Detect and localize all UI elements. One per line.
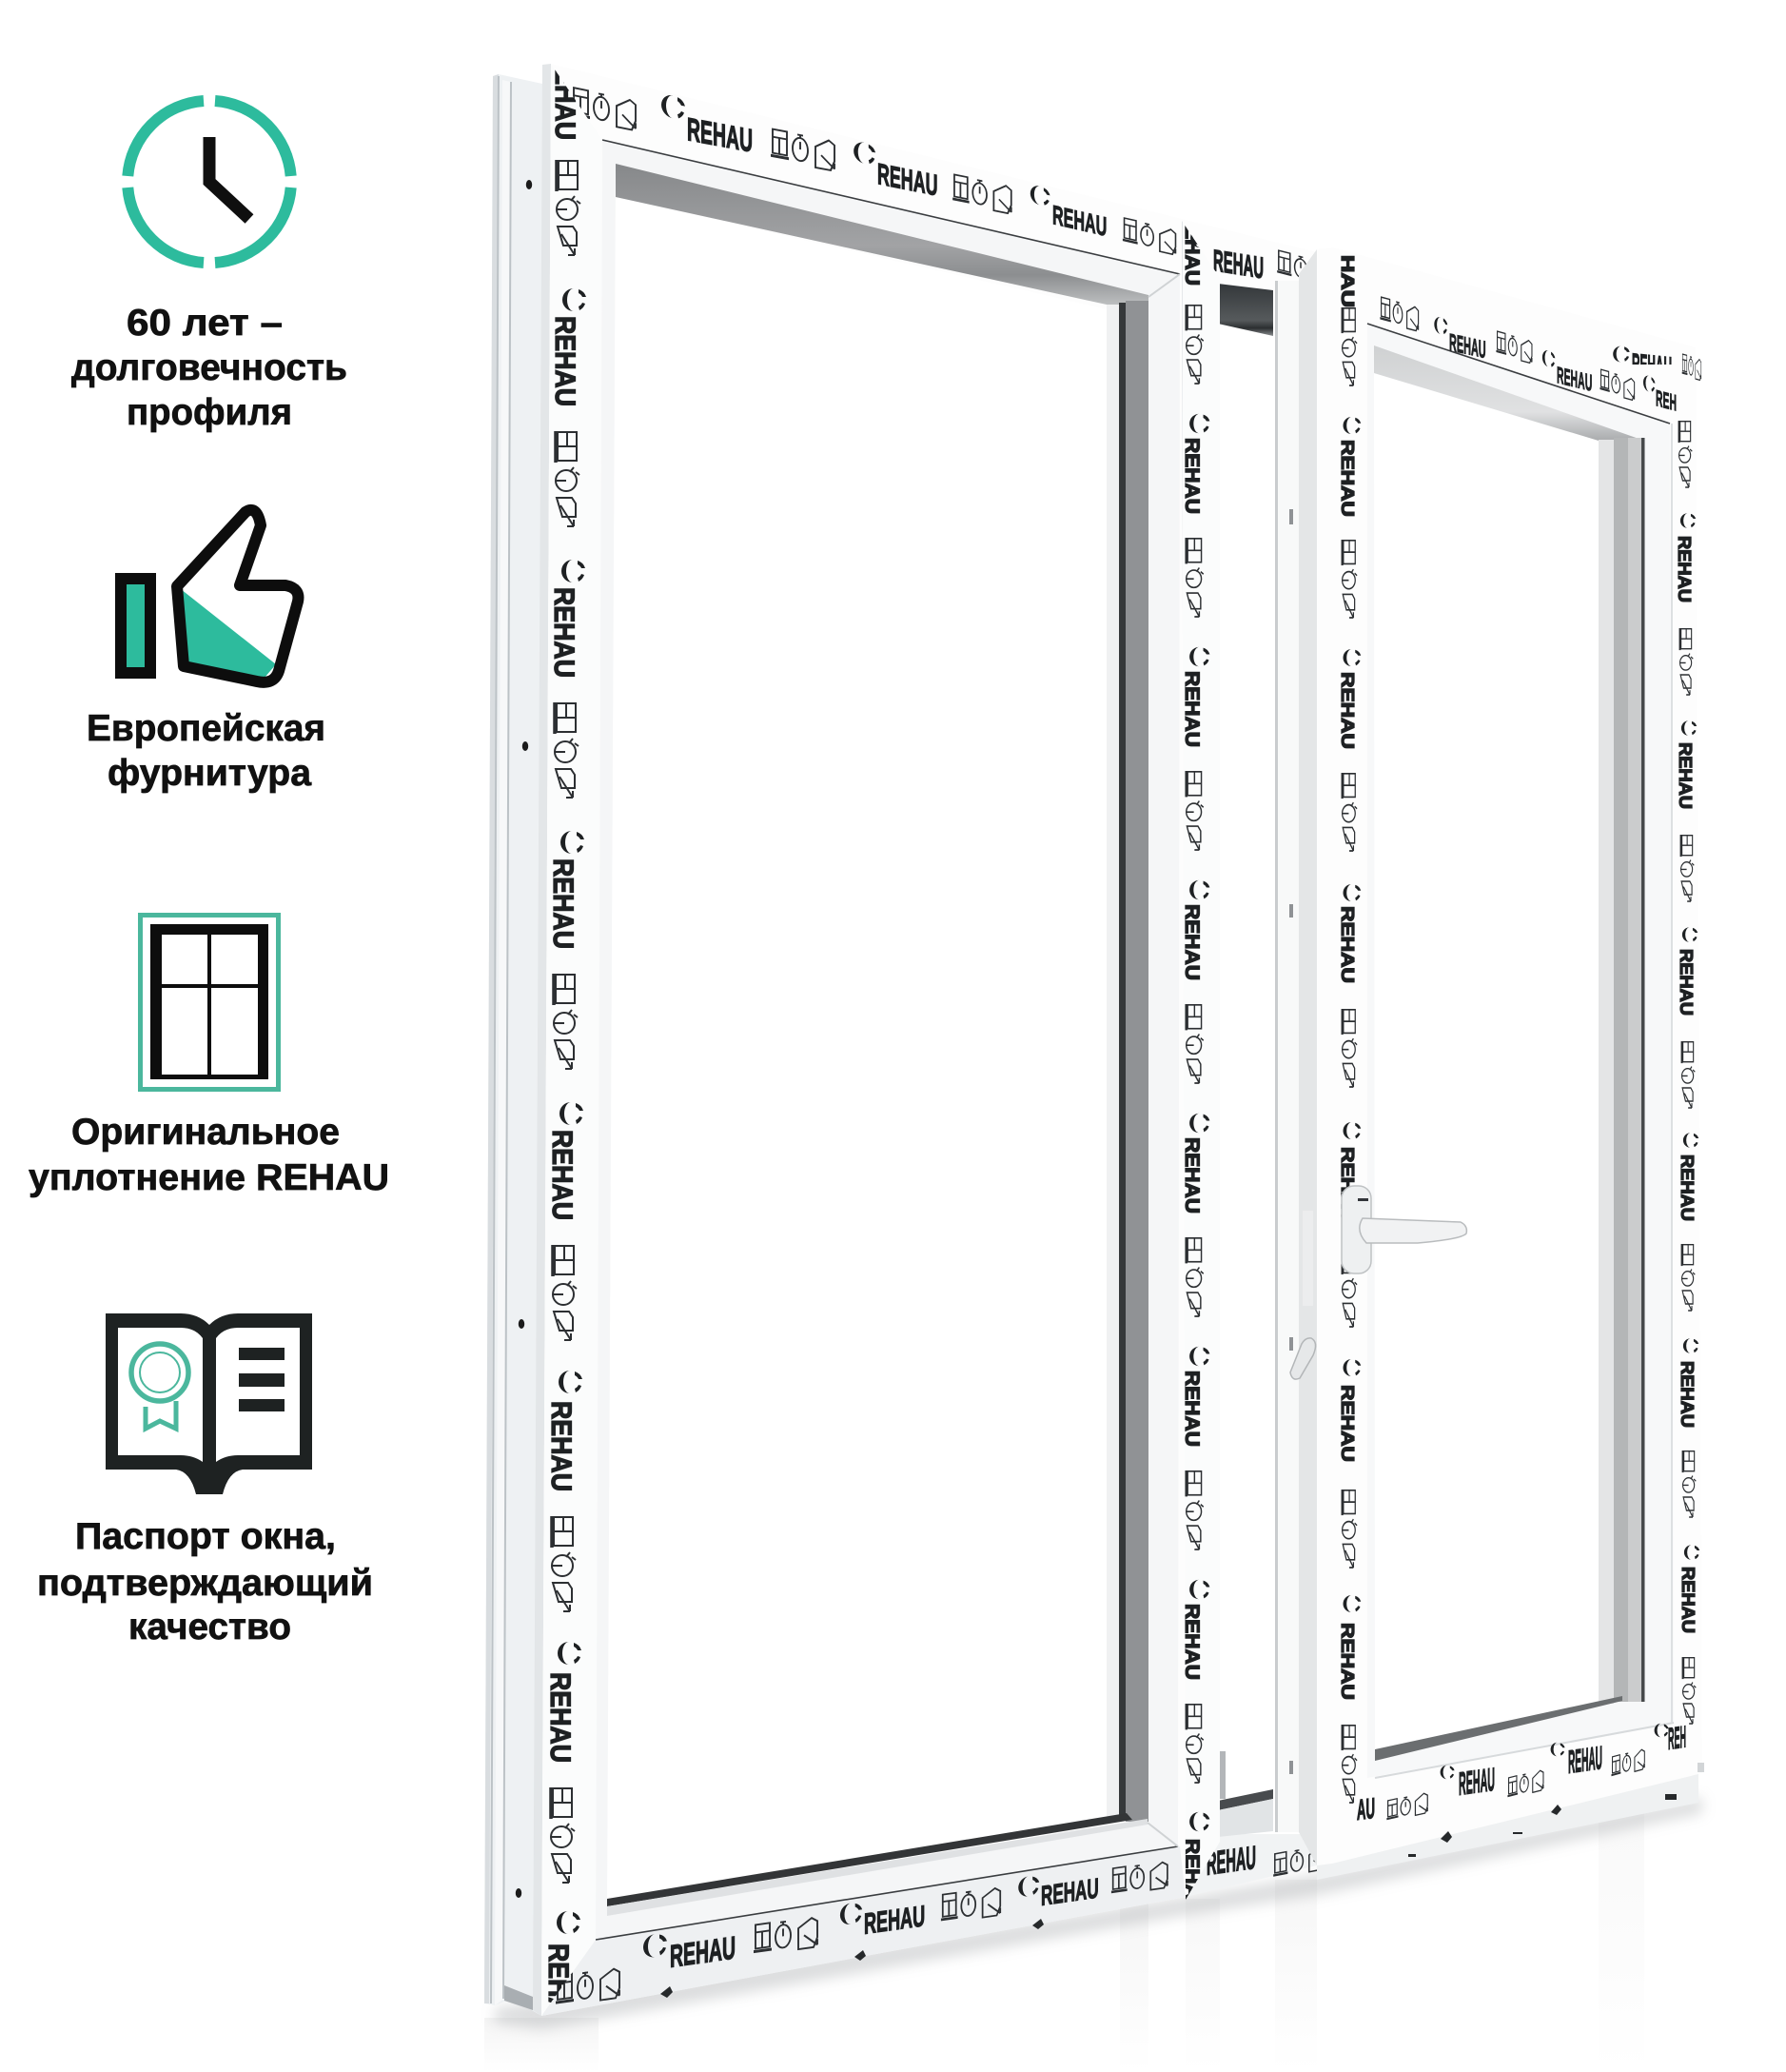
film print: left jamb: REHAU	[544, 1672, 576, 1763]
feature: original seal	[29, 916, 389, 1198]
film print: centre mullion	[1182, 221, 1220, 1900]
film print: sash stile: REHAU	[1338, 1147, 1357, 1224]
film print: sash bottom bar: REH	[1668, 1719, 1686, 1756]
window: back frame sill under the sash	[1317, 1766, 1698, 1880]
header and sill between frames: REHAU	[1207, 1840, 1256, 1883]
window: left fixed frame	[541, 64, 1186, 2016]
film print: bottom bar of left frame: REHAU	[670, 1930, 736, 1975]
film print: centre mullion: REHAU	[1181, 209, 1203, 286]
film print: centre mullion: REHAU	[1181, 1604, 1203, 1680]
text: window passport: качество	[128, 1607, 291, 1648]
text: 60 years durability	[71, 303, 347, 433]
film print: sash top bar: REH	[1656, 386, 1677, 416]
film print: left jamb: REHAU	[545, 1401, 577, 1491]
film print: sash top bar: REHAU	[1449, 327, 1486, 364]
film print: sash top bar: REHAU	[1557, 362, 1592, 397]
film print: right jamb	[1675, 421, 1699, 1724]
text: original seal: уплотнение REHAU	[29, 1157, 389, 1198]
feature: window passport	[37, 1313, 373, 1648]
film print: centre mullion: REHAU	[1181, 1371, 1203, 1447]
text: window passport: подтверждающий	[37, 1563, 373, 1604]
film print: top bar of left frame: REHAU	[687, 111, 753, 160]
film print: right jamb: REHAU	[1676, 742, 1695, 809]
text: european hardware	[87, 708, 325, 794]
film print: left jamb: REHAU	[548, 587, 579, 678]
window: opening sash	[1275, 247, 1702, 1865]
frame white body	[596, 140, 1180, 1940]
film print: sash stile: REHAU	[1338, 1385, 1357, 1462]
cut print fragments on lower sill	[1408, 1794, 1677, 1857]
film print: sash bottom bar: REHAU	[1459, 1762, 1495, 1803]
text: window passport: Паспорт окна,	[75, 1516, 336, 1557]
film print: right jamb: REHAU	[1677, 949, 1696, 1016]
sash bottom bead	[1375, 1696, 1622, 1761]
film print: top bar of left frame	[572, 88, 1175, 259]
text: original seal	[29, 1112, 389, 1198]
film print: centre mullion: REHAU	[1181, 904, 1203, 980]
text: 60 years durability: профиля	[127, 392, 292, 433]
film print: left jamb: REHAU	[547, 858, 579, 949]
film print: sash bottom bar: AU	[1357, 1793, 1375, 1826]
bottom glazing bead	[607, 1813, 1132, 1906]
sash top bead	[1374, 345, 1644, 441]
sash frame body	[1367, 324, 1674, 1778]
film print: sash stile: REHAU	[1338, 672, 1357, 749]
door handle	[1342, 1186, 1466, 1273]
film print: sash bottom bar: REHAU	[1568, 1740, 1602, 1781]
text: european hardware: Европейская	[87, 708, 325, 749]
film print: left jamb: REHAU	[546, 1130, 578, 1220]
icon: seal medal	[131, 1344, 188, 1429]
cut logo fragments on the sill edge	[660, 1919, 1044, 1998]
film print: right jamb: REHAU	[1678, 1567, 1698, 1633]
film print: bottom bar of left frame: REHAU	[864, 1899, 925, 1941]
film print: centre mullion: REHAU	[1181, 671, 1203, 747]
film print: bottom bar of left frame: REHAU	[1041, 1874, 1099, 1912]
film print: sash top bar: REHAU	[1632, 348, 1672, 384]
feature: european hardware	[87, 510, 325, 794]
text: original seal: Оригинальное	[71, 1112, 340, 1153]
top glazing bead	[616, 164, 1148, 312]
floor reflection	[484, 1808, 1644, 2072]
film print: sash stile: HAU	[1338, 255, 1357, 307]
film print: right jamb: REHAU	[1678, 1154, 1697, 1221]
film print: bottom bar of left frame	[556, 1857, 1168, 2006]
sash glass	[1374, 369, 1600, 1761]
film print: top bar of left frame: REHAU	[1052, 200, 1107, 243]
window: outer frame depth	[484, 64, 551, 2016]
film print: sash stile: REHAU	[1338, 1623, 1357, 1700]
film print: top bar of left frame: REHAU	[877, 156, 937, 203]
film print: left jamb	[548, 69, 602, 2003]
film print: left jamb: REHAU	[549, 49, 580, 140]
film print: centre mullion: REHAU	[1181, 1839, 1203, 1915]
upper opening	[1218, 284, 1273, 336]
film print: sash top bar	[1380, 297, 1701, 416]
text: window passport	[37, 1516, 373, 1648]
text: 60 years durability: 60 лет –	[127, 303, 283, 344]
icon: thumbs up	[121, 510, 298, 682]
film print: right jamb: REHAU	[1678, 1361, 1697, 1428]
film print: centre mullion: REHAU	[1181, 1137, 1203, 1214]
film print: centre mullion: REHAU	[1181, 438, 1203, 514]
lower opening	[1218, 1751, 1273, 1837]
sash edge	[1275, 249, 1317, 1865]
glass pane left	[607, 197, 1120, 1897]
header and sill between frames: REHAU	[1213, 243, 1264, 286]
film print: left jamb: REHAU	[542, 1944, 574, 2034]
film print: left jamb: REHAU	[549, 316, 580, 406]
icon: window seal	[141, 916, 278, 1089]
text: european hardware: фурнитура	[108, 753, 311, 794]
screw holes	[516, 180, 532, 1898]
film print: sash stile	[1338, 255, 1361, 1803]
floor shadow	[495, 1797, 1702, 2029]
icon: clock	[128, 101, 291, 263]
sash face	[1317, 247, 1702, 1865]
film print: sash bottom bar	[1357, 1719, 1704, 1857]
film print: sash stile: REHAU	[1338, 906, 1357, 983]
text: 60 years durability: долговечность	[71, 347, 347, 388]
header and sill between frames	[1182, 219, 1328, 1897]
tilt catch	[1290, 1338, 1316, 1379]
right glazing bead	[1107, 301, 1148, 1822]
film print: sash stile: REHAU	[1338, 440, 1357, 517]
sash side bead	[1599, 438, 1644, 1704]
window: back frame sill under the sash: REHAU	[1630, 1776, 1670, 1815]
film print: right jamb: REHAU	[1675, 536, 1694, 602]
icon: passport book	[106, 1313, 312, 1494]
feature: 60 years	[71, 101, 347, 433]
